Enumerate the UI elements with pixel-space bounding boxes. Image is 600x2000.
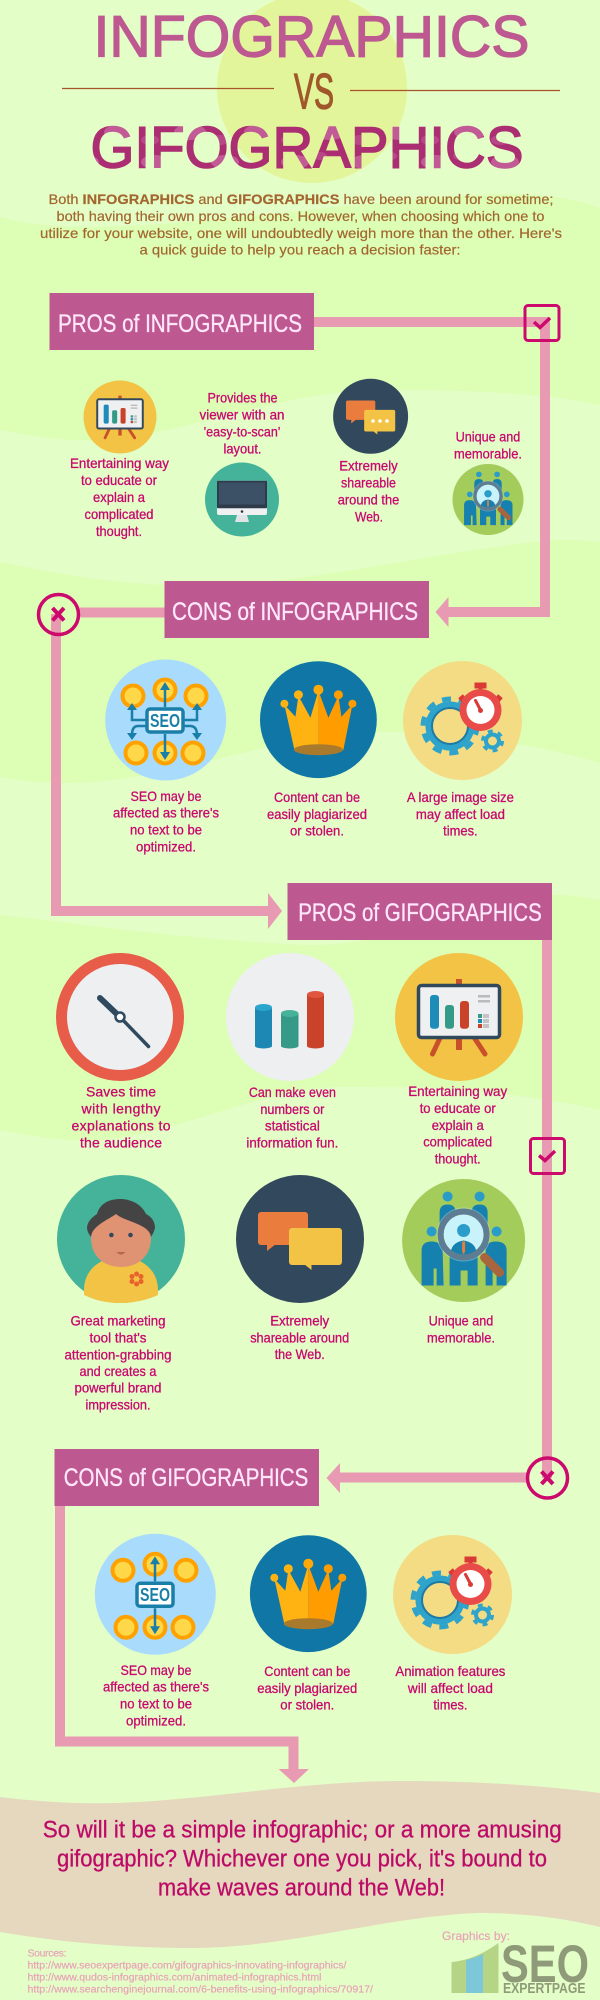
text: great marketing tool (64, 1313, 172, 1413)
text: entertaining way: Entertaining way (408, 1083, 507, 1099)
text: unique and memorable: memorable. (427, 1329, 495, 1345)
heading: pros of gifographics (288, 883, 552, 940)
heading: cons of infographics: CONS of INFOGRAPHICS (172, 598, 418, 626)
icon: crown (250, 1535, 367, 1652)
text: extremely shareable (250, 1313, 349, 1362)
text: easy to scan: 'easy-to-scan' (204, 424, 280, 440)
text: large image size: may affect load (416, 806, 505, 822)
text: content plagiarized: Content can be (264, 1663, 350, 1679)
text: saves time: the audience (80, 1134, 162, 1150)
heading: pros of gifographics: PROS of GIFOGRAPHICS (298, 899, 542, 927)
sources: http://www.searchenginejournal.com/6-benefits-using-infographics/70917/ (28, 1984, 373, 1996)
text: SEO may be affected (103, 1662, 209, 1728)
heading: pros of infographics: PROS of INFOGRAPHICS (58, 310, 302, 338)
text: entertaining way: to educate or (81, 472, 157, 488)
text: SEO may be affected: no text to be (130, 822, 202, 838)
intro text: a quick guide to help you reach a decision faster: (140, 242, 460, 258)
icon: check box (530, 1138, 564, 1174)
icon: speech bubbles large (236, 1175, 364, 1303)
text: SEO may be affected: optimized. (136, 838, 196, 854)
text: statistical information: Can make even (249, 1084, 336, 1100)
text: entertaining way: complicated (84, 506, 154, 522)
title: INFOGRAPHICS: INFOGRAPHICS (94, 4, 530, 70)
title: GIFOGRAPHICS: GIFOGRAPHICS (90, 116, 524, 180)
icon: presentation easel large (395, 953, 523, 1081)
text: animation features: times. (433, 1697, 467, 1713)
conclusion text (43, 1816, 562, 1901)
text: SEO may be affected: SEO may be (130, 788, 202, 804)
text: great marketing tool: tool that's (90, 1329, 146, 1345)
text: saves time: with lengthy (80, 1101, 160, 1117)
icon: x circle (38, 594, 78, 634)
text: entertaining way: complicated (423, 1134, 492, 1150)
text: animation features: Animation features (395, 1663, 505, 1679)
title: VS: VS (294, 64, 334, 120)
text: statistical information: information fun. (246, 1134, 338, 1150)
text: SEO may be affected: no text to be (120, 1696, 192, 1712)
icon: people under magnifier (452, 464, 524, 535)
intro text: Both INFOGRAPHICS and GIFOGRAPHICS have been around for sometime; (48, 191, 554, 207)
icon: crown (260, 661, 377, 778)
text: easy to scan: layout. (224, 440, 262, 456)
text: extremely shareable: Web. (355, 508, 383, 524)
text: SEO may be affected: SEO may be (120, 1662, 192, 1678)
text: entertaining way: explain a (93, 489, 145, 505)
panel: cons of infographics items (105, 660, 522, 854)
text: entertaining way: thought. (96, 523, 142, 539)
text: content plagiarized: easily plagiarized (257, 1680, 357, 1696)
flow arrow: cons of gifographics to conclusion (60, 1506, 309, 1783)
icon: SEO network: SEO (140, 1585, 170, 1605)
text: large image size (407, 789, 514, 839)
text: great marketing tool: Great marketing (70, 1313, 166, 1329)
text: unique and memorable (454, 429, 522, 461)
icon: speech bubbles (333, 379, 408, 454)
text: SEO may be affected: optimized. (126, 1712, 186, 1728)
icon: person avatar (57, 1175, 185, 1303)
text: easy to scan: viewer with an (200, 407, 284, 423)
text: extremely shareable: around the (338, 492, 399, 508)
text: entertaining way: explain a (432, 1117, 484, 1133)
text: easy to scan (200, 390, 284, 456)
icon: SEO network: SEO (150, 711, 180, 731)
icon: x circle (528, 1458, 568, 1498)
text: saves time: Saves time (86, 1084, 156, 1100)
text: content plagiarized (257, 1663, 357, 1713)
flow arrow: cons of infographics to pros of gifographics (56, 612, 282, 929)
icon: presentation easel (84, 380, 156, 454)
icon: monitor (205, 462, 279, 536)
sources: http://www.qudos-infographics.com/animated-infographics.html (28, 1972, 322, 1984)
text: SEO may be affected: affected as there's (103, 1679, 209, 1695)
text: statistical information (246, 1084, 338, 1150)
text: unique and memorable: memorable. (454, 445, 522, 461)
intro text: both having their own pros and cons. However, when choosing which one to (56, 208, 545, 224)
text: statistical information: numbers or (260, 1101, 325, 1117)
heading: cons of gifographics (54, 1449, 319, 1506)
conclusion wave band (0, 1781, 600, 1948)
text: large image size: A large image size (407, 789, 514, 805)
heading: cons of gifographics: CONS of GIFOGRAPHICS (64, 1464, 308, 1492)
intro text: utilize for your website, one will undoubtedly weigh more than the other. Here's (40, 225, 562, 241)
text: unique and memorable: Unique and (456, 429, 520, 445)
text: entertaining way (408, 1083, 507, 1166)
icon: cylinder bar chart (226, 953, 354, 1081)
text: extremely shareable: Extremely (270, 1313, 329, 1329)
flow arrow: pros of infographics to cons of infographics (314, 322, 545, 627)
icon: gears and stopwatch (403, 661, 522, 780)
logo: SEO expert page (452, 1935, 589, 1997)
title (62, 4, 560, 180)
text: entertaining way: to educate or (420, 1100, 496, 1116)
credit: graphics by: Graphics by: (442, 1929, 510, 1943)
text: great marketing tool: and creates a (80, 1363, 157, 1379)
text: SEO may be affected: affected as there's (113, 805, 219, 821)
text: animation features (395, 1663, 505, 1713)
text: unique and memorable: Unique and (429, 1313, 493, 1329)
icon: gears and stopwatch (393, 1535, 512, 1654)
text: content plagiarized: Content can be (274, 789, 360, 805)
text: extremely shareable (338, 458, 399, 524)
icon: check box (525, 306, 559, 340)
text: entertaining way: Entertaining way (70, 455, 169, 471)
text: entertaining way (70, 455, 169, 539)
panel: pros of infographics items (70, 379, 524, 539)
text: content plagiarized (267, 789, 367, 839)
text: saves time: explanations to (72, 1118, 171, 1134)
conclusion text: make waves around the Web! (158, 1874, 445, 1901)
panel: pros of gifographics items (56, 953, 525, 1413)
text: great marketing tool: attention-grabbing (64, 1346, 172, 1362)
flow arrow: pros of gifographics to cons of gifographics (326, 940, 547, 1493)
icon: clock (56, 953, 184, 1081)
text: great marketing tool: powerful brand (74, 1380, 162, 1396)
text: content plagiarized: easily plagiarized (267, 806, 367, 822)
text: statistical information: statistical (265, 1118, 320, 1134)
text: animation features: will affect load (407, 1680, 493, 1696)
text: great marketing tool: impression. (86, 1397, 150, 1413)
text: SEO may be affected (113, 788, 219, 854)
sources: Sources: (28, 1948, 66, 1960)
icon: SEO network (105, 660, 226, 780)
text: unique and memorable (427, 1313, 495, 1345)
text: saves time (72, 1084, 171, 1150)
text: entertaining way: thought. (435, 1150, 481, 1166)
text: content plagiarized: or stolen. (290, 823, 344, 839)
text: content plagiarized: or stolen. (280, 1697, 334, 1713)
heading: cons of infographics (164, 581, 429, 638)
panel: cons of gifographics items (95, 1534, 512, 1728)
intro text (40, 191, 562, 258)
text: extremely shareable: shareable (341, 475, 396, 491)
sources (28, 1948, 373, 1996)
icon: people under magnifier large (402, 1179, 525, 1302)
heading: pros of infographics (50, 293, 314, 350)
text: large image size: times. (443, 823, 478, 839)
icon: SEO network (95, 1534, 216, 1655)
decorative yellow circle behind title (217, 0, 407, 183)
text: extremely shareable: Extremely (339, 458, 398, 474)
conclusion text: So will it be a simple infographic; or a more amusing (43, 1816, 562, 1843)
text: extremely shareable: shareable around (250, 1329, 349, 1345)
text: easy to scan: Provides the (208, 390, 278, 406)
text: extremely shareable: the Web. (275, 1346, 325, 1362)
conclusion text: gifographic? Whichever one you pick, it's bound to (57, 1846, 547, 1873)
sources: http://www.seoexpertpage.com/gifographics-innovating-infographics/ (28, 1960, 347, 1972)
